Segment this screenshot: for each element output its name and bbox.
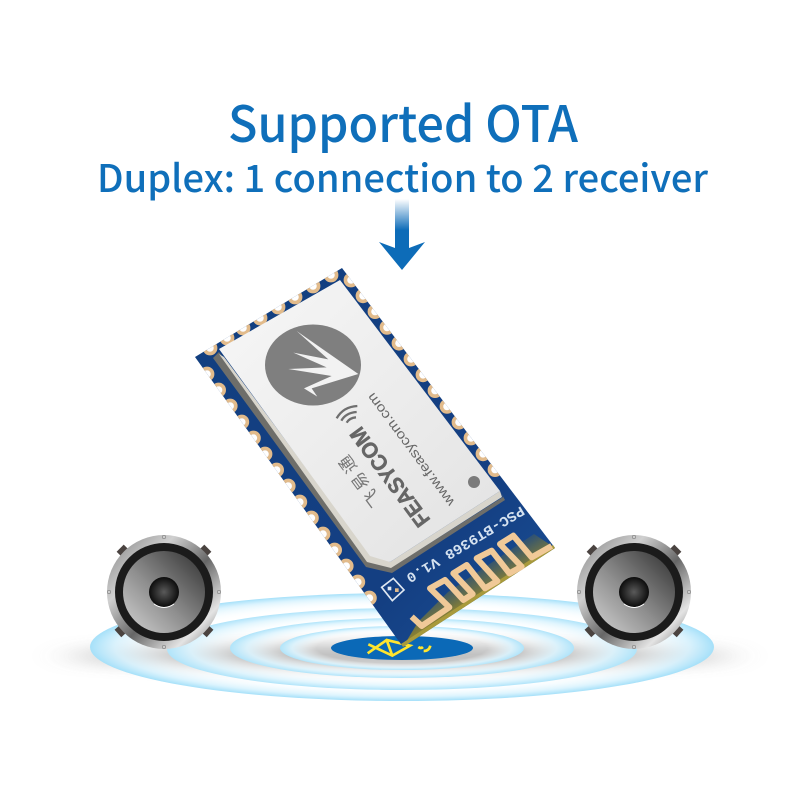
castellated pads [202, 270, 500, 604]
floor shadow [70, 646, 730, 666]
bluetooth module [195, 268, 555, 647]
logo disc [265, 324, 361, 406]
subtitle: Duplex: 1 connection to 2 receiver [97, 148, 708, 203]
title: Supported OTA [228, 85, 579, 157]
silkscreen pad mark [382, 578, 404, 601]
shield dot [468, 476, 480, 488]
chinese brand: 飞易通 [333, 448, 386, 510]
wireless waves mark [337, 406, 357, 423]
metal shield side wall [213, 352, 505, 573]
blue centre disc with bluetooth icon [331, 636, 473, 660]
arrow pointing down to module [379, 199, 425, 270]
PCB antenna trace [412, 536, 552, 626]
model label: PSC-BT9368 V1.0 [403, 502, 527, 585]
signal rings [90, 593, 714, 701]
board edge tint [403, 534, 555, 647]
pad notches [203, 271, 499, 602]
right speaker [577, 535, 691, 649]
infographic canvas [64, 102, 736, 701]
left speaker [107, 535, 221, 649]
metal shield top face [219, 280, 500, 562]
website: www.feasycom.com [364, 390, 458, 510]
circuit board [195, 268, 555, 647]
brand name: FEASYCOM [345, 422, 435, 532]
